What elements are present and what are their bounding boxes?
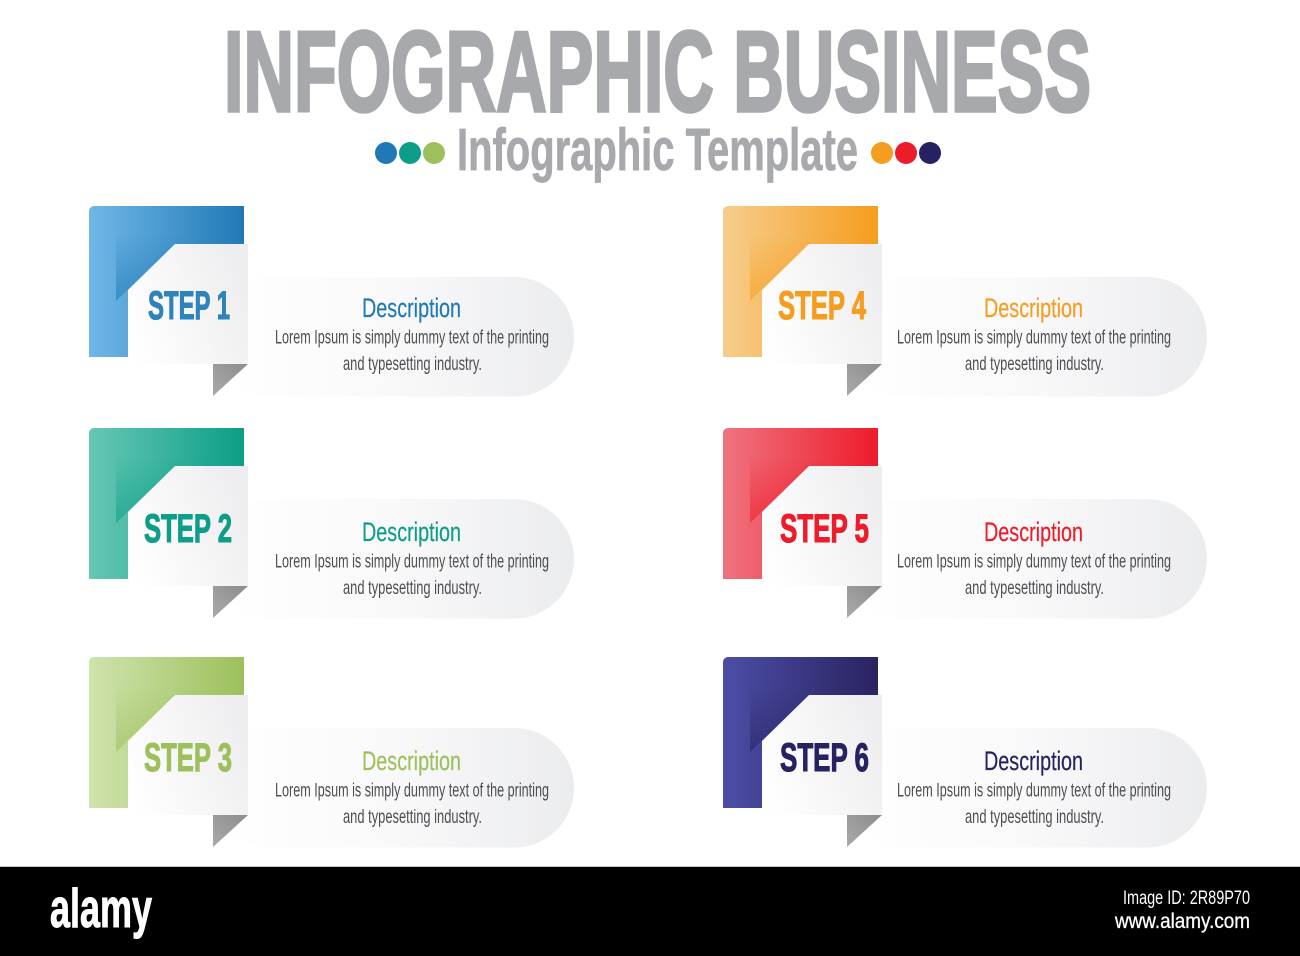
step 6 body text — [897, 780, 1171, 828]
step 5 description heading: Description — [984, 517, 1083, 547]
step 3 description heading: Description — [362, 746, 461, 776]
step 2 body text: and typesetting industry. — [343, 577, 482, 599]
step 1 body text — [275, 326, 549, 375]
step 1 label: STEP 1 — [148, 284, 230, 328]
step 6 body text: and typesetting industry. — [965, 806, 1104, 828]
panel: step 6 — [723, 657, 1207, 848]
step 3 label: STEP 3 — [144, 736, 232, 780]
panel: step 1 — [89, 206, 574, 396]
panel: step 5 — [723, 428, 1207, 618]
footer bar — [0, 866, 1300, 956]
step 3 body text: Lorem Ipsum is simply dummy text of the printing — [275, 780, 549, 802]
step 2 description heading: Description — [362, 517, 461, 547]
step 5 body text: and typesetting industry. — [965, 577, 1104, 599]
step 1 description heading: Description — [362, 293, 461, 323]
step 4 description heading: Description — [984, 293, 1083, 323]
step 3 body text — [275, 780, 549, 828]
step 4 body text — [897, 326, 1171, 375]
step 2 body text: Lorem Ipsum is simply dummy text of the printing — [275, 550, 549, 572]
image id: Image ID: 2R89P70 — [1123, 888, 1250, 909]
step 2 label: STEP 2 — [144, 507, 232, 551]
step 2 body text — [275, 550, 549, 599]
subtitle: Infographic Template — [457, 117, 858, 183]
step 6 description heading: Description — [984, 746, 1083, 776]
step 4 body text: and typesetting industry. — [965, 353, 1104, 375]
panel: step 3 — [89, 657, 574, 848]
panel: step 4 — [723, 206, 1207, 396]
step 4 label: STEP 4 — [778, 284, 866, 328]
step 1 body text: and typesetting industry. — [343, 353, 482, 375]
step 3 body text: and typesetting industry. — [343, 806, 482, 828]
step 6 label: STEP 6 — [780, 736, 869, 780]
step 1 body text: Lorem Ipsum is simply dummy text of the printing — [275, 326, 549, 348]
footer logo: alamy — [50, 877, 152, 939]
step 5 label: STEP 5 — [780, 507, 869, 551]
step 5 body text — [897, 550, 1171, 599]
icon: right dots — [871, 142, 941, 164]
panel: step 2 — [89, 428, 574, 618]
website: www.alamy.com — [1114, 910, 1250, 933]
icon: left dots — [375, 142, 445, 164]
